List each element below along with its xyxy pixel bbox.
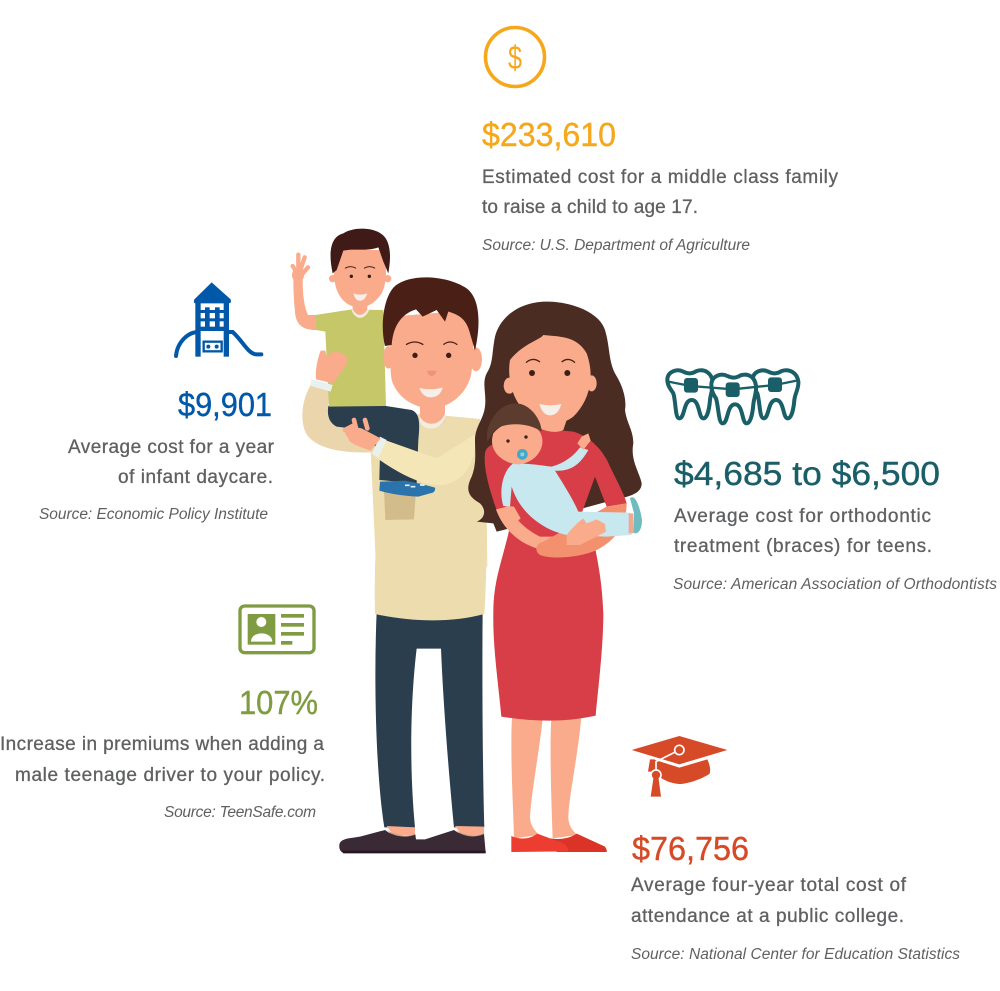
older boy: arm and hand waving xyxy=(293,280,316,330)
source: AAO: Source: American Association of Orthodontists xyxy=(673,576,997,593)
icon: dollar coin xyxy=(486,28,544,86)
figure: $4,685 to $6,500: $4,685 to $6,500 xyxy=(674,455,940,492)
woman: red shoes xyxy=(511,834,607,852)
baby xyxy=(487,403,642,537)
man: raised arm xyxy=(302,385,390,452)
woman, baby and hands xyxy=(487,335,642,558)
man: head xyxy=(383,277,482,408)
figure: $9,901: $9,901 xyxy=(178,386,272,423)
icon: teeth with braces xyxy=(667,370,798,423)
source: USDA: Source: U.S. Department of Agriculture xyxy=(482,237,750,254)
description: college: Average four-year total cost of xyxy=(631,875,907,896)
item: teen driver premiums xyxy=(0,606,325,821)
man and older boy upper body xyxy=(292,229,482,520)
description: braces xyxy=(674,506,932,557)
icon: graduation cap xyxy=(632,736,727,797)
man: hand holding boy xyxy=(316,351,347,383)
description: premiums xyxy=(0,734,325,786)
shirt pocket xyxy=(384,490,416,520)
older boy: blue sneakers xyxy=(379,481,435,497)
icon: dollar coin: $ xyxy=(508,39,522,76)
older boy: head xyxy=(329,229,391,307)
woman: hand on baby xyxy=(567,518,606,545)
man: forearm hugging boy xyxy=(373,433,477,485)
description: braces: treatment (braces) for teens. xyxy=(674,536,932,557)
icon: driver licence xyxy=(240,606,314,653)
older boy: trousers xyxy=(328,406,419,483)
man: neck xyxy=(420,405,445,427)
description: daycare: Average cost for a year xyxy=(68,437,275,458)
description: premiums: male teenage driver to your policy. xyxy=(15,765,325,786)
source: EPI: Source: Economic Policy Institute xyxy=(39,506,268,523)
description: premiums: Increase in premiums when adding a xyxy=(0,734,324,755)
item: cost to raise a child xyxy=(482,28,838,254)
woman: dress xyxy=(485,428,627,721)
description: college xyxy=(631,875,907,927)
woman: arm behind baby xyxy=(496,506,567,550)
item: public college xyxy=(631,736,960,963)
description: raising a child xyxy=(482,167,838,218)
figure: 107%: 107% xyxy=(239,684,318,721)
description: daycare xyxy=(68,437,275,488)
man: trousers xyxy=(375,612,484,827)
description: braces: Average cost for orthodontic xyxy=(674,506,931,527)
description: college: attendance at a public college. xyxy=(631,906,904,927)
white sneaker stripes xyxy=(405,485,425,487)
woman: hair xyxy=(468,302,642,532)
baby: head xyxy=(492,422,542,464)
man: shirt torso xyxy=(371,413,487,567)
item: orthodontic treatment xyxy=(667,370,997,593)
man: shoes xyxy=(339,826,486,853)
figure: $233,610: $233,610 xyxy=(482,116,616,153)
older boy: shirt xyxy=(315,309,386,407)
description: daycare: of infant daycare. xyxy=(118,467,273,488)
description: raising a child: Estimated cost for a middle class family xyxy=(482,167,838,188)
woman: legs xyxy=(511,717,581,838)
family illustration xyxy=(292,229,642,853)
woman: head xyxy=(504,335,597,432)
source: NCES: Source: National Center for Education Statistics xyxy=(631,946,960,963)
figure: $76,756: $76,756 xyxy=(632,830,749,867)
icon: playground xyxy=(176,282,261,357)
item: infant daycare xyxy=(39,282,275,523)
source: TeenSafe: Source: TeenSafe.com xyxy=(164,804,316,821)
description: raising a child: to raise a child to age 17. xyxy=(482,197,698,218)
